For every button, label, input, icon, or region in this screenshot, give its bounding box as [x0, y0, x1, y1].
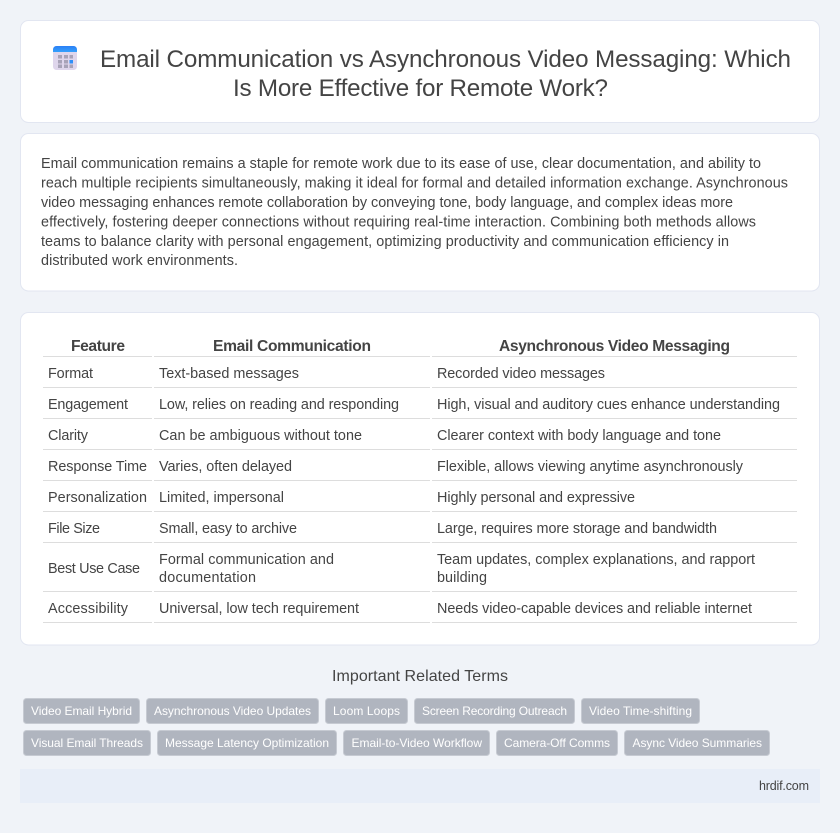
- text block: summary: video messaging enhances remote collaboration by conveying tone, body language, and complex ideas more: [41, 195, 733, 211]
- tag: Async Video Summaries: Async Video Summaries: [632, 736, 762, 750]
- table row: Engagement: Engagement: [48, 397, 128, 413]
- table header: Email Communication: [213, 338, 371, 355]
- icon: calendar: [53, 46, 77, 70]
- table row: File Size: Small, easy to archive: [159, 521, 297, 537]
- table row: Engagement: [43, 397, 797, 419]
- table row: File Size: [43, 521, 797, 543]
- text block: summary: reach multiple recipients simultaneously, making it ideal for formal and detailed information exchange. Asynchronous: [41, 176, 788, 192]
- table header: Feature: [71, 338, 125, 355]
- table row: Best Use Case: Best Use Case: [48, 561, 140, 577]
- table row: Format: Text-based messages: [159, 366, 299, 382]
- table row: Clarity: [43, 428, 797, 450]
- table row: File Size: Large, requires more storage and bandwidth: [437, 521, 717, 537]
- tag group: related terms: [24, 698, 770, 756]
- tag: Visual Email Threads: Visual Email Threads: [31, 736, 143, 750]
- table header: [43, 338, 797, 357]
- panel: summary paragraph: [20, 134, 820, 291]
- table row: Accessibility: Accessibility: [48, 601, 129, 617]
- table row: Engagement: Low, relies on reading and responding: [159, 397, 399, 413]
- table row: Accessibility: Universal, low tech requirement: [159, 601, 359, 617]
- tag: Video Email Hybrid: Video Email Hybrid: [31, 704, 132, 718]
- table row: Best Use Case: Team updates, complex explanations, and rapport: [437, 552, 755, 568]
- tag: Visual Email Threads: [24, 730, 150, 756]
- tag: Video Time-shifting: [582, 698, 700, 724]
- tag: Loom Loops: Loom Loops: [333, 704, 400, 718]
- table row: Format: Format: [48, 366, 93, 382]
- text block: summary: Email communication remains a staple for remote work due to its ease of use, clear documentation, and ability to: [41, 156, 761, 172]
- table row: Accessibility: [43, 601, 797, 623]
- tag: Camera-Off Comms: Camera-Off Comms: [504, 736, 610, 750]
- footer bar: [20, 769, 820, 803]
- table row: Clarity: Clearer context with body language and tone: [437, 428, 721, 444]
- footer text: hrdif.com: hrdif.com: [759, 779, 809, 793]
- table row: Best Use Case: building: [437, 570, 487, 586]
- tag: Video Time-shifting: Video Time-shifting: [589, 704, 692, 718]
- table row: Engagement: High, visual and auditory cues enhance understanding: [437, 397, 780, 413]
- tag: Camera-Off Comms: [496, 730, 618, 756]
- table row: Personalization: [43, 490, 797, 512]
- text block: summary: [41, 156, 788, 269]
- tag: Asynchronous Video Updates: [146, 698, 318, 724]
- tag: Loom Loops: [326, 698, 408, 724]
- table row: Response Time: Varies, often delayed: [159, 459, 292, 475]
- table row: Personalization: Limited, impersonal: [159, 490, 284, 506]
- title: Email Communication vs Asynchronous Video Messaging: Which: [100, 46, 791, 73]
- title: [100, 46, 791, 102]
- tag: Message Latency Optimization: Message Latency Optimization: [165, 736, 329, 750]
- table row: Accessibility: Needs video-capable devices and reliable internet: [437, 601, 752, 617]
- table row: Clarity: Clarity: [48, 428, 89, 444]
- heading: Important Related Terms: Important Related Terms: [332, 668, 508, 685]
- title: Is More Effective for Remote Work?: [233, 75, 608, 102]
- table row: Format: Recorded video messages: [437, 366, 605, 382]
- tag: Async Video Summaries: [624, 730, 770, 756]
- panel: title header: [20, 20, 820, 122]
- text block: summary: effectively, fostering deeper connections without requiring real-time interaction. Combining both methods allows: [41, 214, 756, 230]
- table row: Best Use Case: documentation: [159, 570, 256, 586]
- tag: Asynchronous Video Updates: Asynchronous Video Updates: [154, 704, 311, 718]
- table row: Best Use Case: Formal communication and: [159, 552, 334, 568]
- table row: Best Use Case: [43, 552, 797, 592]
- table row: File Size: File Size: [48, 521, 100, 537]
- text block: summary: distributed work environments.: [41, 253, 238, 269]
- table row: Format: [43, 366, 797, 388]
- table header: Asynchronous Video Messaging: [499, 338, 730, 355]
- tag: Screen Recording Outreach: Screen Recording Outreach: [422, 704, 567, 718]
- table row: Personalization: Personalization: [48, 490, 147, 506]
- tag: Message Latency Optimization: [158, 730, 336, 756]
- tag: Email-to-Video Workflow: Email-to-Video Workflow: [352, 736, 482, 750]
- table row: Response Time: [43, 459, 797, 481]
- table row: Clarity: Can be ambiguous without tone: [159, 428, 362, 444]
- tag: Screen Recording Outreach: [414, 698, 574, 724]
- tag: Video Email Hybrid: [24, 698, 140, 724]
- table row: Personalization: Highly personal and expressive: [437, 490, 635, 506]
- table row: Response Time: Response Time: [48, 459, 147, 475]
- table row: Response Time: Flexible, allows viewing anytime asynchronously: [437, 459, 744, 475]
- tag: Email-to-Video Workflow: [344, 730, 490, 756]
- panel: comparison table: [20, 312, 820, 645]
- text block: summary: teams to balance clarity with personal engagement, optimizing productivity and communication efficiency in: [41, 234, 729, 250]
